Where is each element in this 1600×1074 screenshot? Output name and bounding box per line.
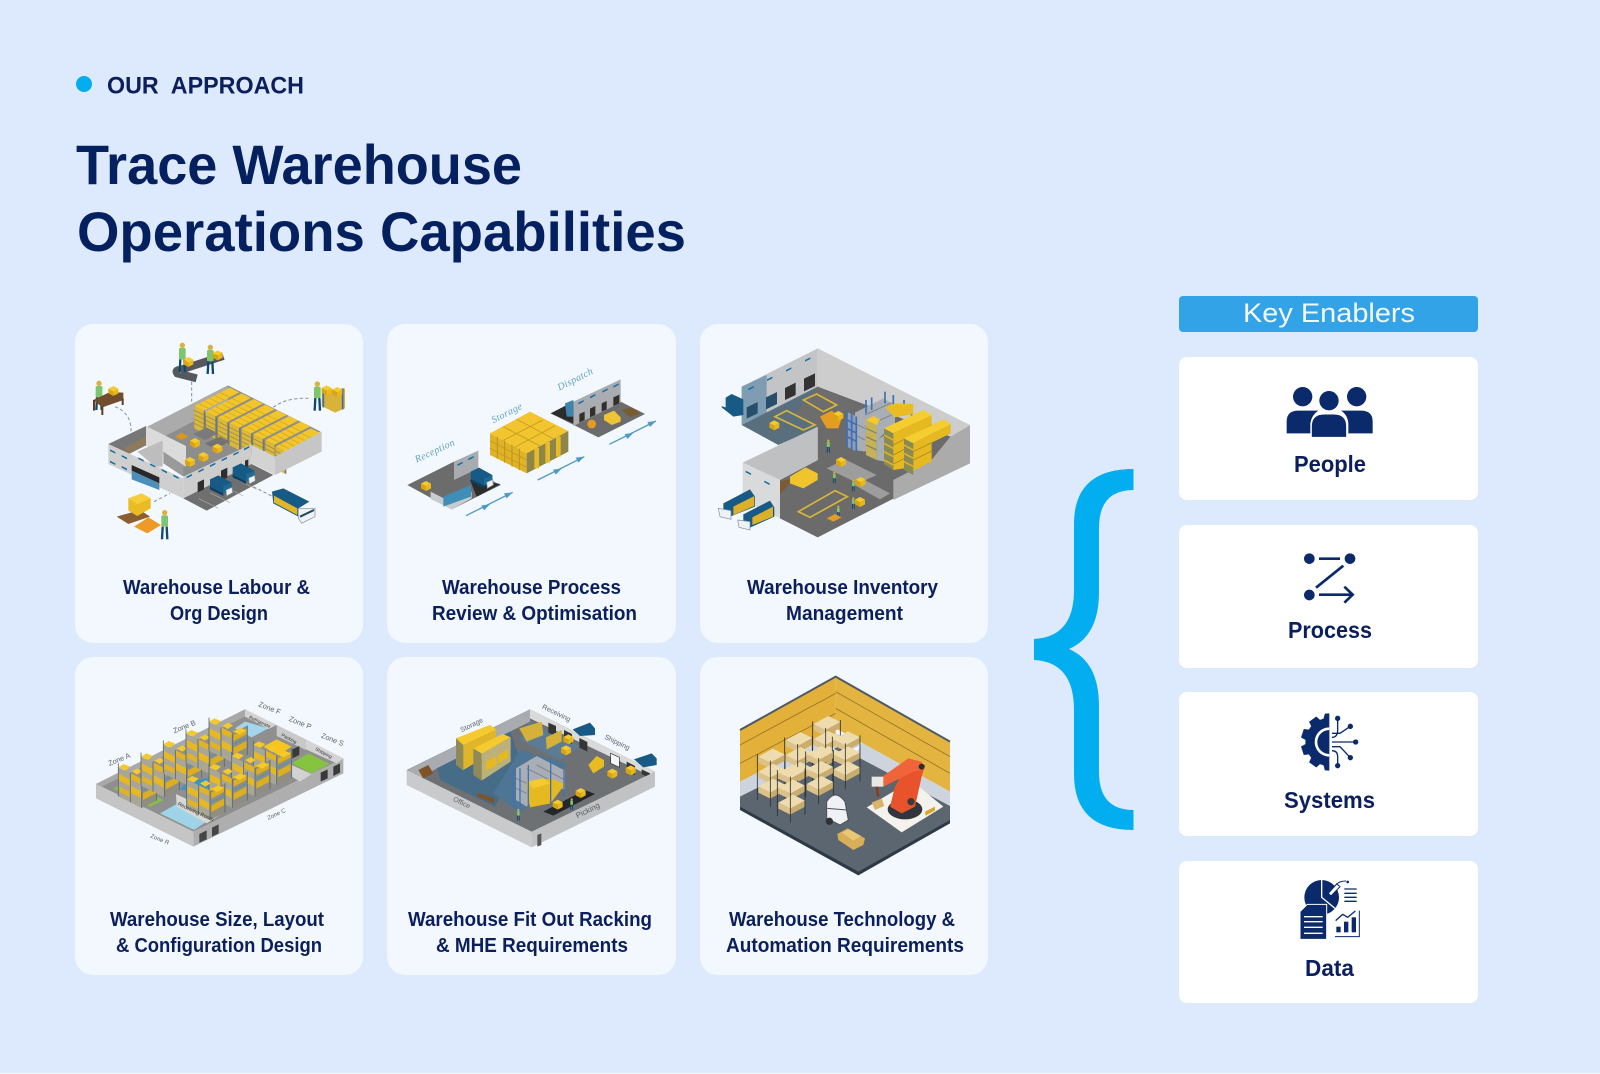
label: Warehouse Size, Layout — [110, 909, 324, 931]
key enablers header: Key Enablers — [1243, 298, 1415, 328]
illustration: reception storage dispatch flow: Storage — [490, 401, 525, 426]
illustration: zoned warehouse floor plan: Zone R — [149, 834, 170, 847]
label: Review & Optimisation — [432, 603, 637, 625]
panel: systems — [1179, 692, 1478, 836]
label — [747, 577, 939, 625]
illustration: zoned warehouse floor plan: Zone B — [172, 718, 197, 735]
illustration: automated warehouse room with robot arm — [740, 677, 950, 875]
key enablers header — [1179, 296, 1478, 332]
illustration: warehouse fit out floor: Receiving — [541, 704, 572, 724]
panel: warehouse size, layout and configuration design — [75, 657, 363, 975]
illustration: warehouse fit out floor: Storage — [459, 717, 485, 734]
illustration: zoned warehouse floor plan: Zone A — [107, 751, 132, 768]
illustration: zoned warehouse floor plan: Packing — [281, 732, 298, 745]
illustration: warehouse fit out floor — [407, 704, 657, 847]
icon: systems — [1301, 713, 1358, 771]
illustration: zoned warehouse floor plan: Zone S — [320, 731, 345, 748]
illustration: zoned warehouse floor plan: Zone C — [267, 808, 288, 822]
label: Process — [1288, 617, 1372, 643]
illustration: warehouse with surrounding labour stations — [93, 343, 345, 539]
brace — [1034, 469, 1134, 830]
label — [123, 577, 310, 625]
title: Trace Warehouse — [76, 133, 522, 196]
label: Org Design — [170, 603, 268, 625]
label: Automation Requirements — [726, 935, 964, 957]
label: Warehouse Process — [442, 577, 621, 599]
label: & MHE Requirements — [436, 935, 628, 957]
label — [110, 909, 324, 957]
eyebrow: our approach: OUR APPROACH — [107, 72, 304, 100]
panel: warehouse technology and automation requirements — [700, 657, 988, 975]
icon: data — [1300, 880, 1359, 939]
panel: warehouse fit out racking and MHE requirements — [387, 657, 676, 975]
label: & Configuration Design — [116, 935, 322, 957]
icon: people — [1287, 387, 1373, 437]
label: Data — [1305, 955, 1354, 981]
illustration: warehouse fit out floor: Office — [452, 796, 471, 810]
label: Warehouse Inventory — [747, 577, 939, 599]
title: Operations Capabilities — [77, 200, 686, 263]
panel: warehouse labour and org design — [75, 324, 363, 643]
label: Warehouse Labour & — [123, 577, 310, 599]
illustration: zoned warehouse floor plan — [96, 700, 345, 847]
panel: data — [1179, 861, 1478, 1003]
panel: people — [1179, 357, 1478, 500]
icon: process — [1304, 553, 1355, 603]
label: Warehouse Technology & — [729, 909, 955, 931]
illustration: zoned warehouse floor plan: Zone F — [257, 700, 283, 717]
illustration: zoned warehouse floor plan: Zone P — [288, 714, 313, 731]
label: Management — [786, 603, 903, 625]
illustration: warehouse fit out floor: Shipping — [603, 734, 631, 752]
label — [726, 909, 964, 957]
panel: warehouse process review and optimisation — [387, 324, 676, 643]
illustration: reception storage dispatch flow: Dispatch — [555, 366, 595, 394]
illustration: zoned warehouse floor plan: Shipping — [315, 746, 333, 760]
label — [432, 577, 637, 625]
illustration: reception storage dispatch flow — [407, 366, 656, 516]
illustration: warehouse fit out floor: Picking — [574, 801, 601, 820]
illustration: L-shaped warehouse with racks and trucks — [718, 348, 970, 537]
label: Systems — [1284, 787, 1375, 813]
panel: warehouse inventory management — [700, 324, 988, 643]
title — [76, 133, 686, 263]
illustration: zoned warehouse floor plan: Receiving Room — [176, 801, 215, 824]
label: People — [1294, 451, 1366, 477]
panel: process — [1179, 525, 1478, 668]
illustration: zoned warehouse floor plan: Refrigerate — [248, 715, 272, 729]
illustration: reception storage dispatch flow: Reception — [412, 437, 457, 466]
label — [408, 909, 652, 957]
label: Warehouse Fit Out Racking — [408, 909, 652, 931]
